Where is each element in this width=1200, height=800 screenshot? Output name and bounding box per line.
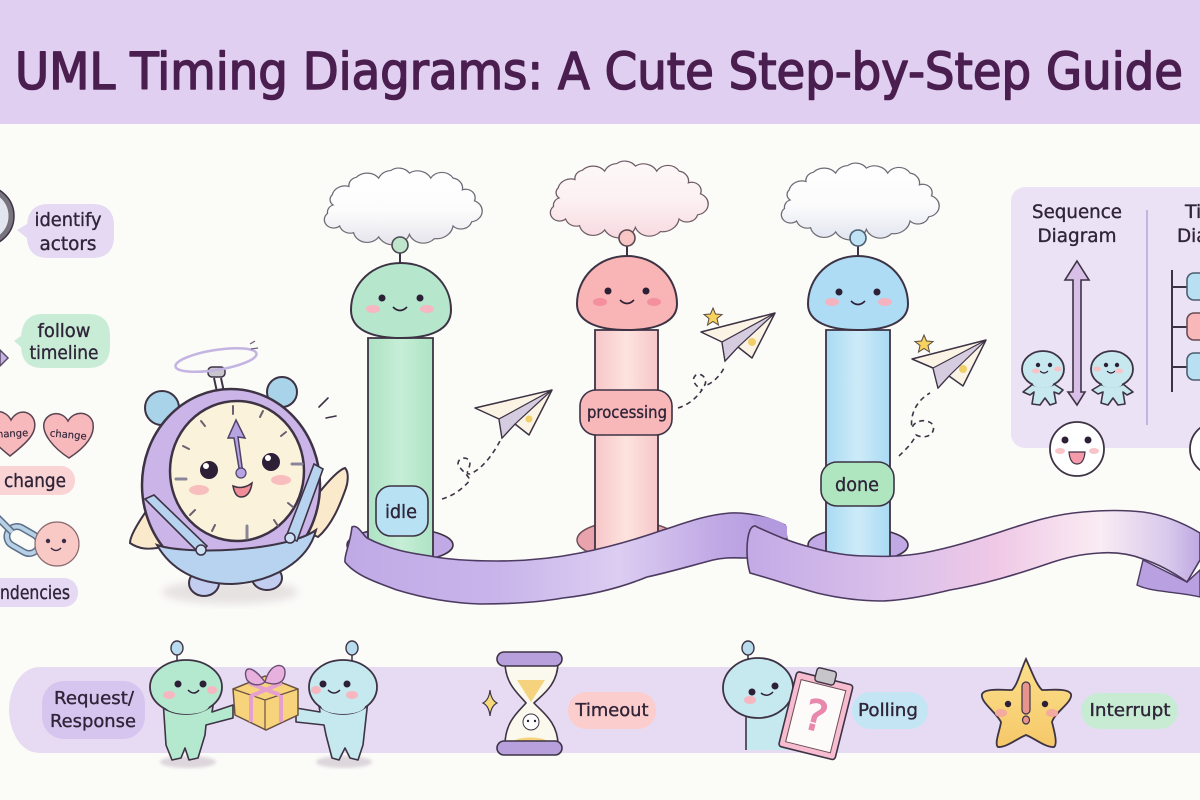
step: identify actors <box>0 186 114 258</box>
heading: sequence diagram: Sequence <box>1032 201 1122 223</box>
column body <box>595 330 658 555</box>
heading: timing diagram <box>1177 201 1200 247</box>
label: idle: idle <box>385 501 417 523</box>
icon: clipboard: ? <box>799 689 833 742</box>
pill: dependencies: ndencies <box>0 582 70 604</box>
character: blue bot <box>723 641 793 750</box>
column body <box>368 338 433 558</box>
character: blue bot <box>296 641 377 760</box>
feet <box>189 570 219 596</box>
bubble: follow timeline <box>14 314 110 368</box>
bubble: identify actors: actors <box>40 233 96 255</box>
pattern: request / response <box>42 641 377 768</box>
pill: polling: Polling <box>858 700 918 721</box>
bubble: follow timeline: timeline <box>30 342 98 364</box>
timing lanes <box>1172 270 1200 392</box>
label: idle <box>376 486 428 536</box>
icon: smiley <box>35 522 79 566</box>
label: processing <box>580 390 672 435</box>
shadow <box>162 580 298 604</box>
icon: chain link <box>0 516 43 557</box>
character: clock mascot <box>130 341 348 604</box>
motion marks <box>319 398 336 418</box>
pill: request/response: Request/ <box>54 688 135 709</box>
figure right <box>1091 351 1133 405</box>
icon: arrow tip <box>0 350 8 366</box>
pill: request/response: Response <box>50 711 136 732</box>
bubble: follow timeline: follow <box>38 320 90 342</box>
heading: sequence diagram: Diagram <box>1038 225 1116 247</box>
label: processing: processing <box>587 403 667 423</box>
bells <box>145 391 179 425</box>
arm right <box>296 468 348 537</box>
overalls <box>157 530 316 584</box>
cloud <box>781 163 939 240</box>
star <box>526 416 532 422</box>
star <box>704 308 722 325</box>
clock hand <box>228 420 245 474</box>
face: eyes, cheeks and mouth <box>189 453 291 497</box>
pill: change: change <box>4 470 66 492</box>
tick marks <box>176 406 302 538</box>
shadows <box>160 756 216 768</box>
header band <box>0 0 1200 124</box>
pattern: timeout <box>483 652 656 755</box>
panel: comparison <box>1011 187 1200 476</box>
icon: sparkle <box>483 690 497 716</box>
state column: idle <box>324 168 482 562</box>
head with stem <box>577 230 677 330</box>
character: green bot <box>150 641 233 760</box>
head with stem <box>808 230 908 330</box>
small star <box>748 338 756 346</box>
cloud <box>550 161 708 238</box>
cloud <box>324 168 482 245</box>
overall straps <box>145 495 207 554</box>
column base ring <box>347 528 453 562</box>
icon: magnifier <box>0 186 14 246</box>
step: dependencies <box>0 516 79 607</box>
timeline ribbon <box>345 510 1200 604</box>
pattern: interrupt <box>982 659 1178 747</box>
head with stem <box>351 237 451 338</box>
label: done: done <box>835 474 879 496</box>
winder and halo <box>214 378 224 392</box>
clock face <box>170 401 304 541</box>
icon: hourglass <box>497 652 562 755</box>
pill: interrupt <box>1081 693 1178 729</box>
icon: star <box>982 659 1071 747</box>
body <box>142 389 320 581</box>
pill: timeout <box>568 692 656 729</box>
paper plane 1 with trail <box>442 390 552 499</box>
pill: polling <box>852 692 928 729</box>
heading: sequence diagram <box>1032 201 1122 247</box>
pill: interrupt: Interrupt <box>1090 700 1170 721</box>
state column: processing <box>550 161 708 559</box>
icon: gift <box>233 665 298 730</box>
double arrow <box>1065 261 1089 405</box>
smiley left <box>1050 422 1104 476</box>
column body <box>826 330 890 558</box>
column base ring <box>577 521 677 559</box>
paper plane 2 with trail <box>678 308 775 408</box>
arm left <box>130 510 182 549</box>
state column: done <box>781 163 939 562</box>
figure left <box>1022 351 1064 405</box>
icon: heart right: change <box>49 428 87 443</box>
star <box>915 335 933 352</box>
column base ring <box>808 528 908 562</box>
step: change <box>0 411 93 495</box>
bubble: identify actors <box>17 204 114 258</box>
pattern: polling <box>723 641 928 760</box>
icon: clipboard <box>778 663 855 760</box>
pill: request/response <box>42 681 145 739</box>
divider <box>1146 210 1148 425</box>
paper plane 3 with trail <box>899 335 986 456</box>
bottom band <box>9 667 1200 753</box>
bubble: identify actors: identify <box>34 209 102 231</box>
pill: timeout: Timeout <box>575 700 648 721</box>
small star <box>959 365 967 373</box>
label: done <box>821 462 894 506</box>
smiley right <box>1190 422 1200 476</box>
step: follow timeline <box>0 314 110 368</box>
